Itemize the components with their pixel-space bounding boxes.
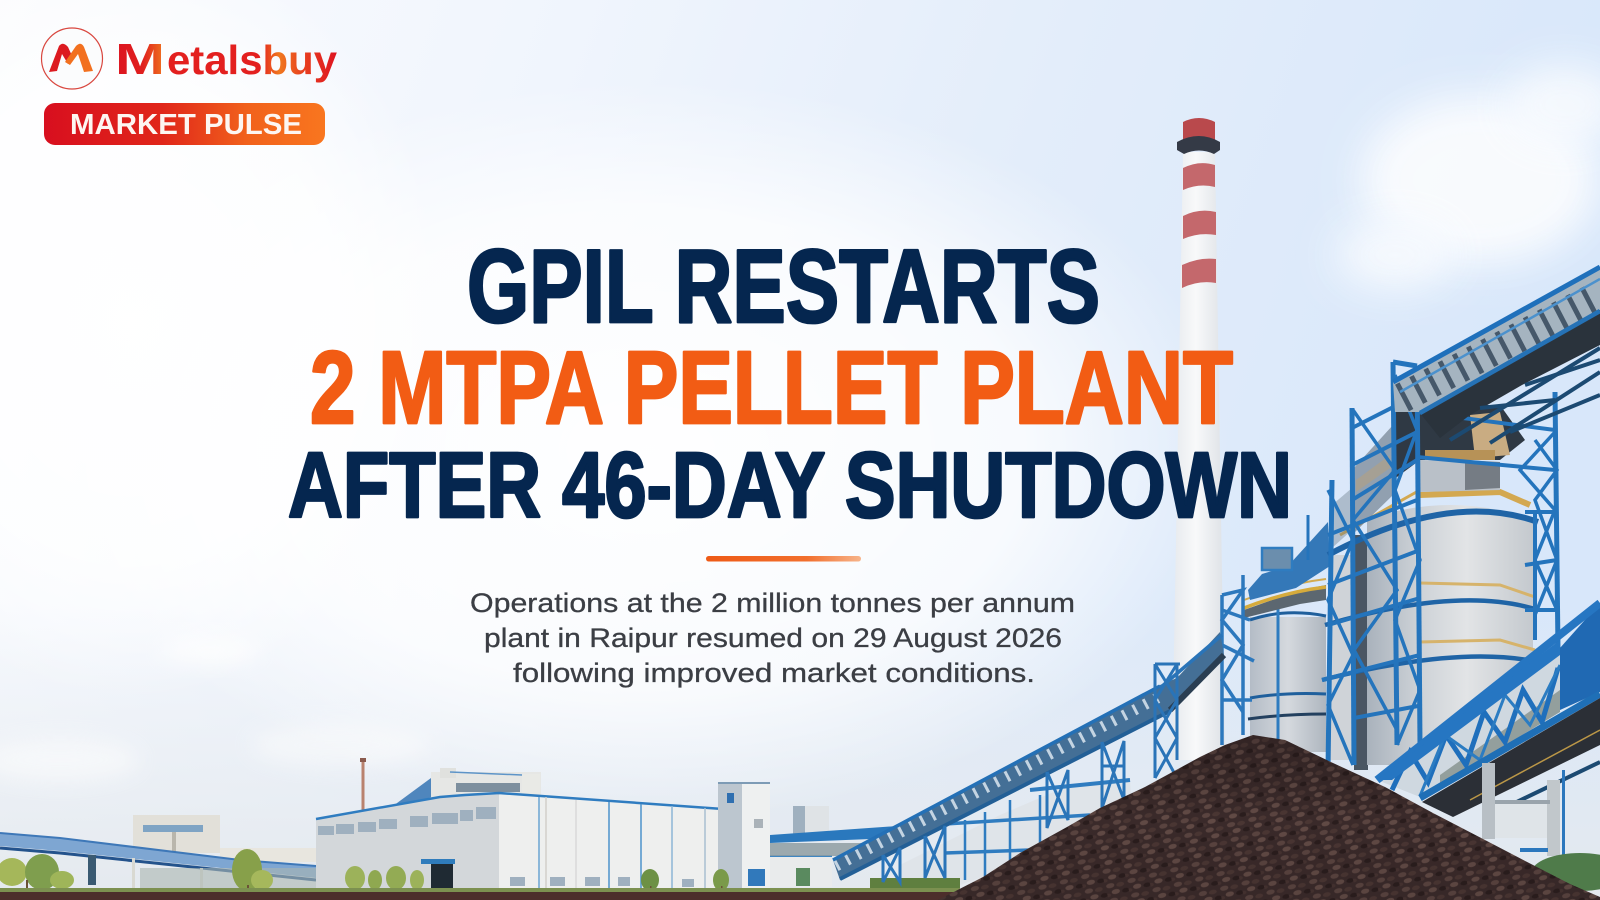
upper right conveyor	[1393, 267, 1600, 443]
conveyor underside	[1422, 698, 1600, 817]
wing interior	[1352, 425, 1393, 535]
left gable wall	[316, 793, 499, 888]
upper equipment	[1332, 405, 1525, 548]
ground strip	[0, 888, 960, 900]
trees along building	[345, 866, 729, 894]
mast	[360, 758, 366, 810]
small silo	[1222, 522, 1330, 752]
logo icon: M in circle	[42, 28, 102, 89]
small silo frame	[1222, 575, 1254, 745]
right side wall	[499, 793, 737, 888]
title line 2: 2 MTPA PELLET PLANT	[310, 330, 1233, 445]
silo bands	[1322, 490, 1538, 680]
window row	[318, 807, 694, 887]
trees left	[0, 849, 273, 894]
logo	[42, 28, 337, 145]
pellet pile	[938, 735, 1600, 900]
bracing	[1328, 375, 1557, 765]
blue housing	[1248, 522, 1330, 600]
lower right conveyor	[1377, 603, 1600, 856]
blue steel frames	[1308, 362, 1558, 770]
horizontal beams	[1322, 395, 1557, 718]
door	[421, 859, 455, 888]
back building	[900, 778, 1132, 885]
title line 1: GPIL RESTARTS	[467, 229, 1100, 345]
title	[288, 229, 1292, 537]
description text: following improved market conditions.	[513, 658, 1035, 688]
scene: distant left plant	[0, 815, 320, 894]
dark column	[1354, 535, 1368, 770]
roof structure	[393, 768, 541, 806]
right trees	[1532, 853, 1600, 891]
tower	[718, 782, 770, 888]
divider	[706, 556, 861, 562]
description text: Operations at the 2 million tonnes per annum	[470, 588, 1075, 618]
main white mill building	[316, 758, 770, 894]
large silo	[1322, 405, 1538, 770]
left conveyor	[0, 833, 320, 890]
brand wordmark: M	[115, 35, 165, 84]
title line 3: AFTER 46-DAY SHUTDOWN	[288, 433, 1292, 537]
description text: plant in Raipur resumed on 29 August 2026	[484, 623, 1062, 653]
red bands	[1182, 163, 1216, 288]
wall panel stripes	[539, 797, 705, 888]
conveyor trestles	[883, 664, 1180, 882]
description text	[470, 588, 1075, 688]
roof edge	[316, 793, 737, 819]
rear cylinder	[1330, 555, 1367, 760]
long inclined conveyor	[833, 632, 1224, 882]
distant left building	[133, 815, 316, 862]
market pulse badge	[44, 103, 325, 145]
hedge	[870, 878, 960, 889]
mid blue conveyor	[770, 826, 897, 856]
support pillars	[1482, 763, 1565, 856]
market pulse badge: MARKET PULSE	[70, 109, 302, 141]
chimney	[1172, 118, 1225, 760]
cap	[1177, 118, 1220, 154]
brand wordmark: etalsbuy	[167, 37, 337, 83]
lattice	[1450, 348, 1600, 443]
mid plant behind conveyor	[748, 778, 1132, 889]
annex and tower	[748, 806, 832, 887]
dark underside	[1420, 310, 1600, 438]
yellow railing	[1244, 585, 1326, 618]
